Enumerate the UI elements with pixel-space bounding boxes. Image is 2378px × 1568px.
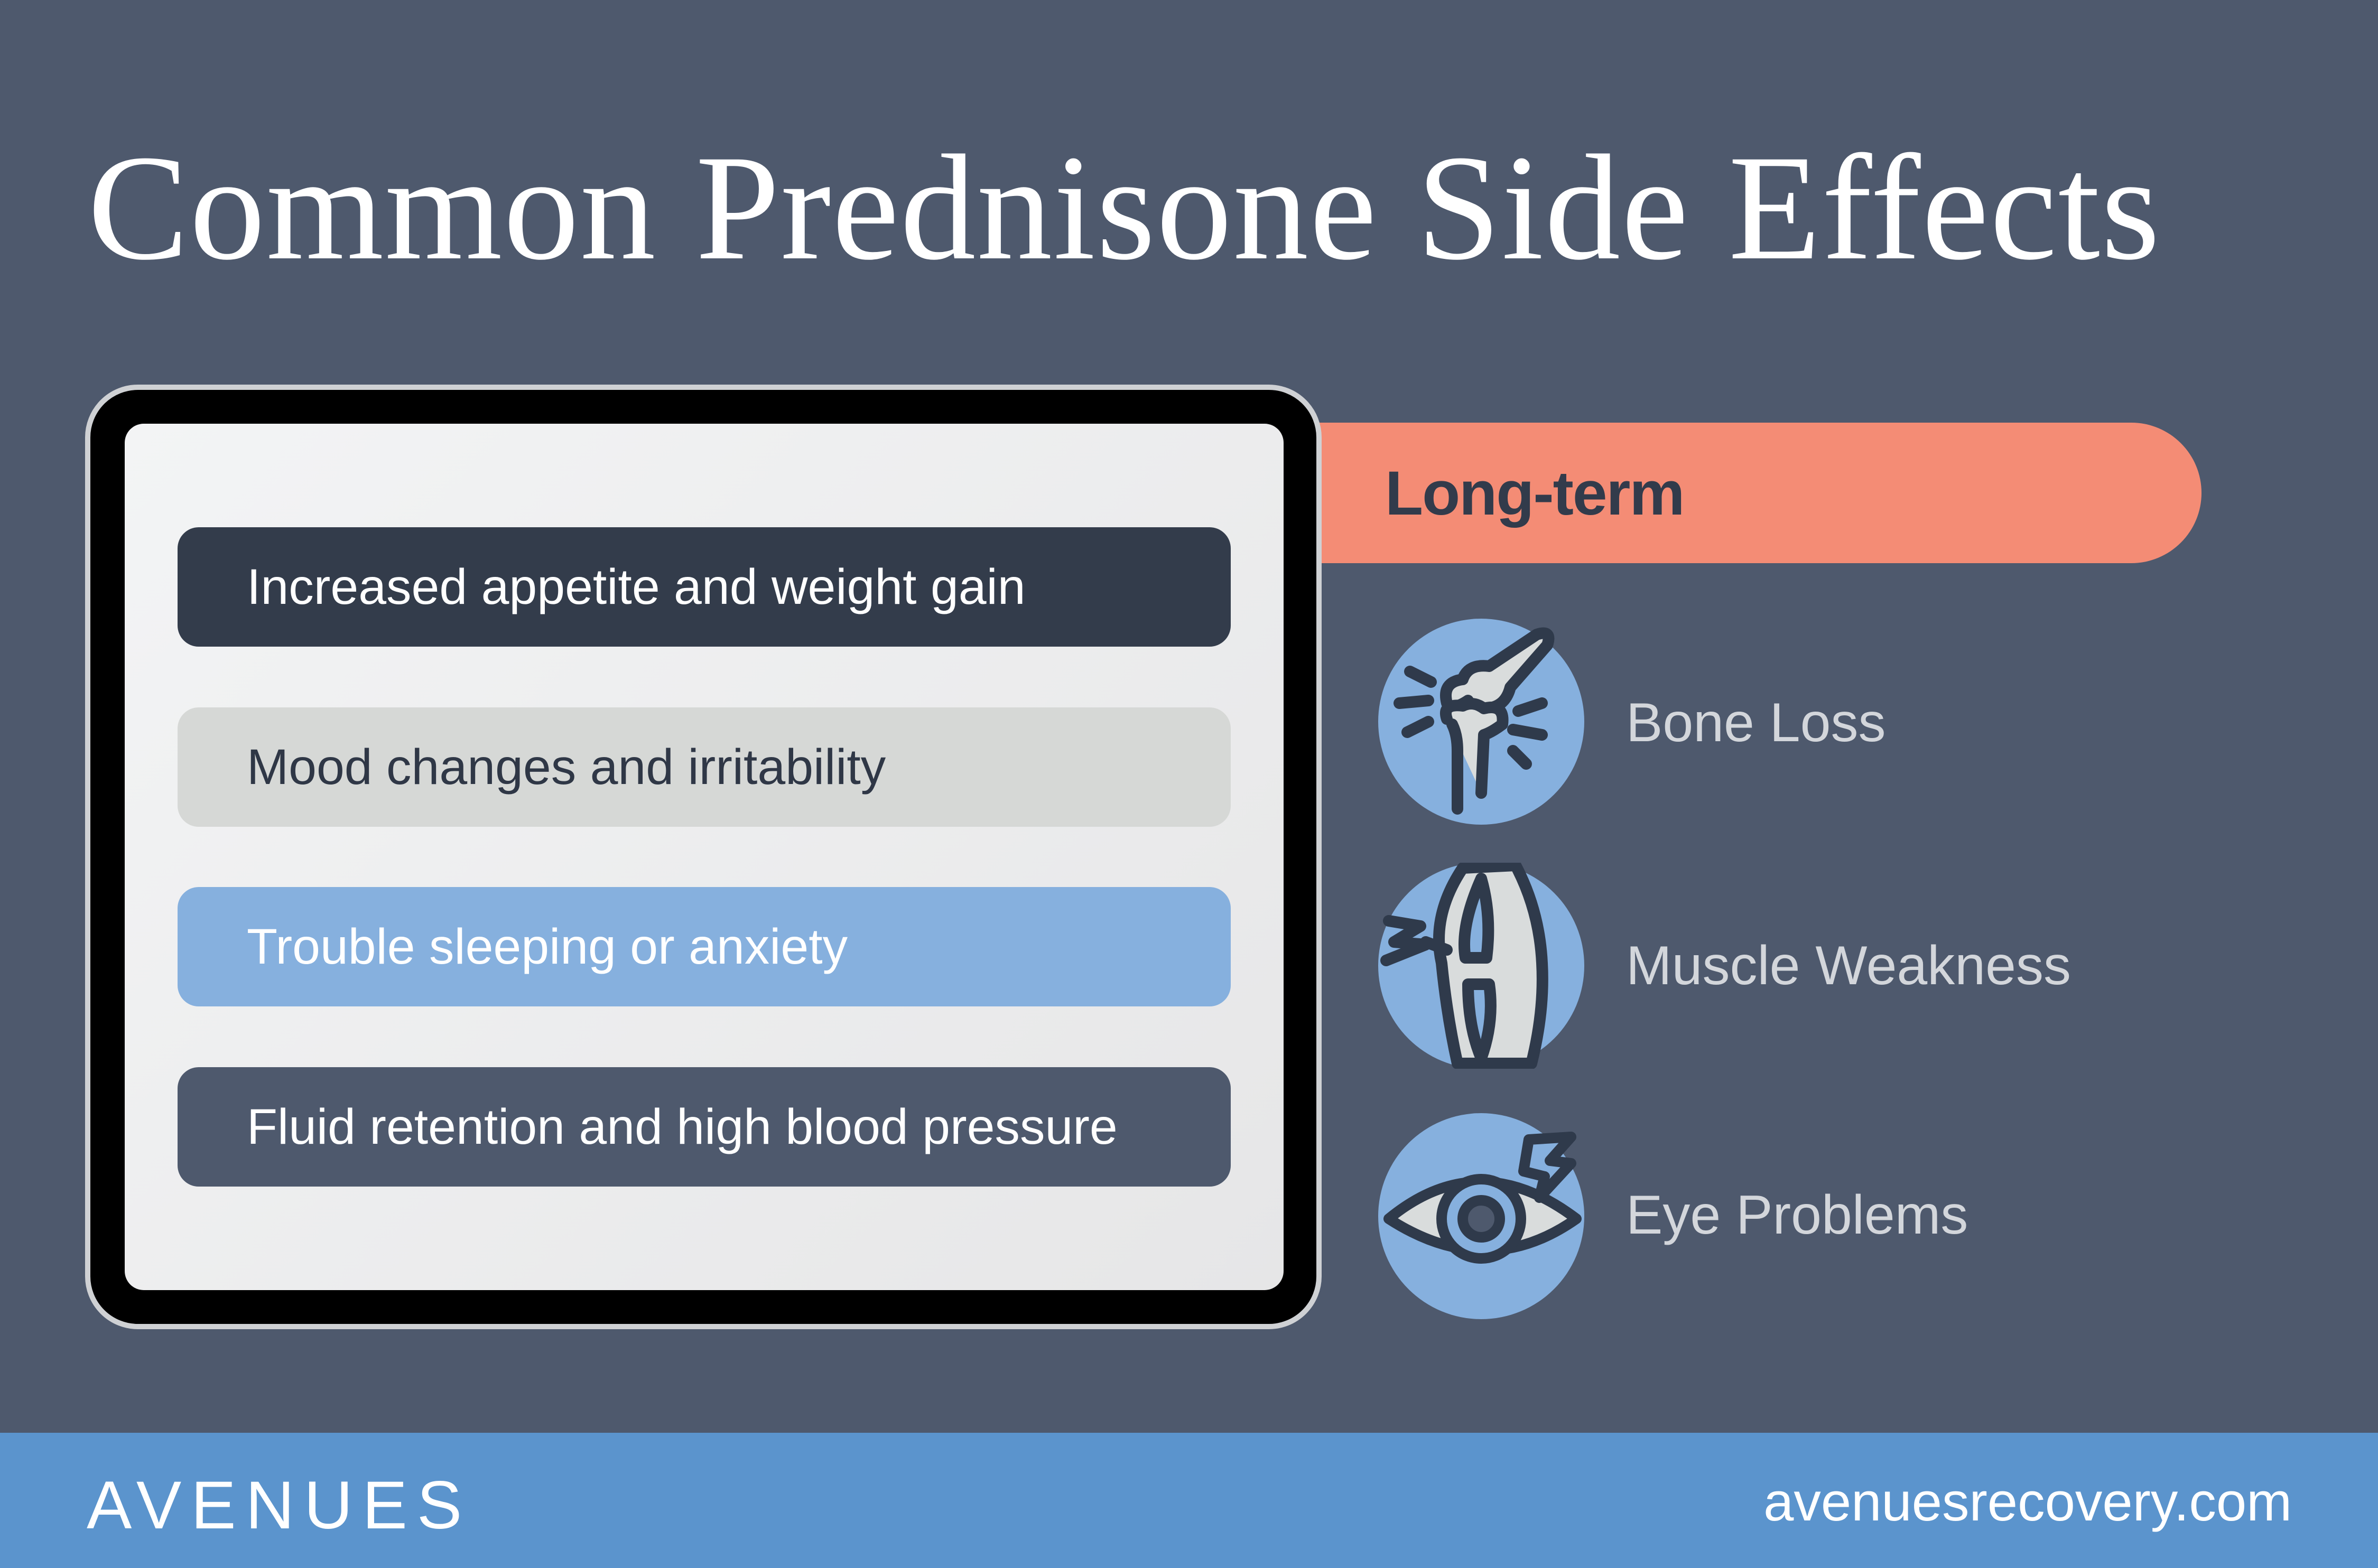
icon: muscle weakness: [1378, 863, 1584, 1069]
icon: eye problems: [1378, 1113, 1584, 1319]
bar: mood: [178, 707, 1231, 827]
bar: mood: Mood changes and irritability: [247, 739, 886, 795]
label: muscle weakness: Muscle Weakness: [1626, 935, 2071, 996]
bar: fluid: Fluid retention and high blood pressure: [247, 1099, 1118, 1155]
bar: fluid: [178, 1067, 1231, 1187]
footer: [0, 1433, 2378, 1568]
footer url: avenuesrecovery.com: [1763, 1471, 2292, 1532]
pill: long-term header: Long-term: [1385, 459, 1684, 528]
bar: sleep: Trouble sleeping or anxiety: [247, 919, 848, 975]
bar: sleep: [178, 887, 1231, 1006]
bar: appetite: [178, 527, 1231, 647]
label: eye problems: Eye Problems: [1626, 1184, 1968, 1246]
label: bone loss: Bone Loss: [1626, 692, 1885, 753]
tablet screen: [125, 424, 1284, 1290]
pill: long-term header: [1268, 423, 2201, 563]
bar: appetite: Increased appetite and weight gain: [247, 559, 1026, 615]
title: Common Prednisone Side Effects: [88, 124, 2161, 291]
logo: AVENUES: AVENUES: [87, 1468, 471, 1543]
icon: bone loss: [1378, 619, 1584, 825]
tablet frame: [85, 385, 1322, 1329]
